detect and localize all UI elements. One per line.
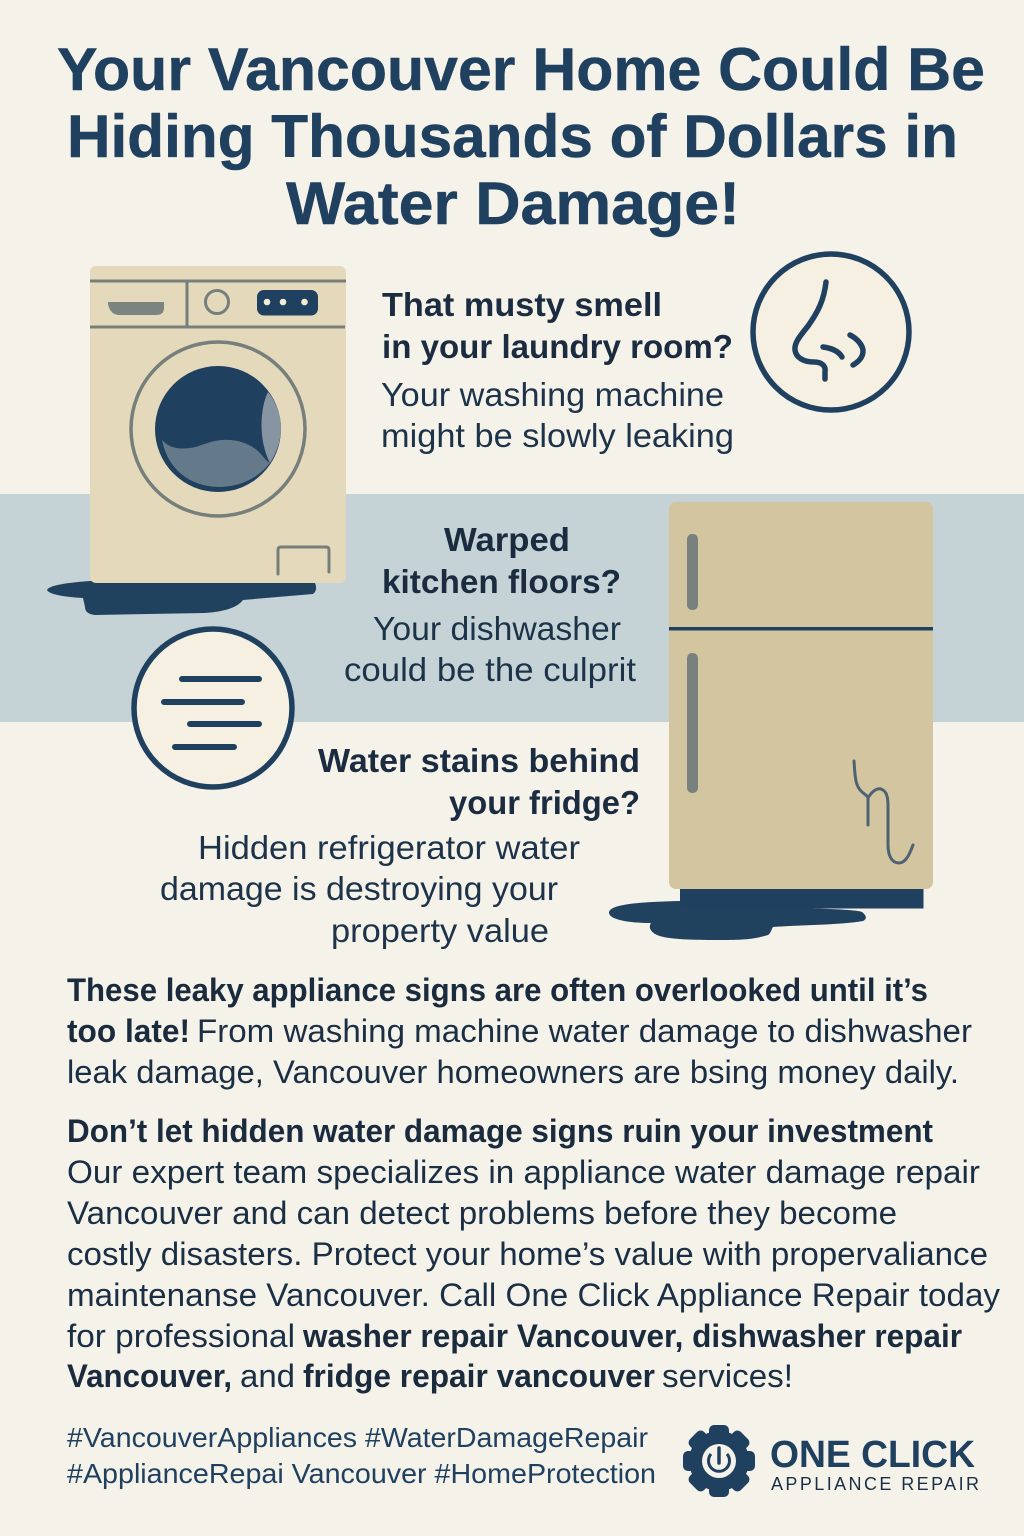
title: Water Damage!: [286, 170, 740, 237]
paragraph: call to action: Vancouver and can detect problems before they become: [67, 1195, 897, 1231]
logo: One Click Appliance Repair: [683, 1425, 979, 1497]
hashtags: #ApplianceRepai Vancouver #HomeProtection: [67, 1458, 656, 1489]
detergent drawer: [108, 302, 164, 315]
paragraph: call to action: services!: [662, 1358, 793, 1394]
paragraph: call to action: fridge repair vancouver: [303, 1358, 655, 1394]
washer door: [131, 342, 305, 516]
fridge base: [680, 888, 924, 908]
hashtags: #VancouverAppliances #WaterDamageRepair: [67, 1422, 648, 1453]
text block: water stains: damage is destroying your: [160, 870, 558, 907]
illustration: leaking washing machine: [47, 266, 346, 615]
paragraph: call to action: washer repair Vancouver, dishwasher repair: [302, 1318, 962, 1354]
paragraph: overlooked signs: too late!: [67, 1013, 190, 1049]
water puddle under fridge: [609, 901, 866, 940]
paragraph: call to action: maintenanse Vancouver. Call One Click Appliance Repair today: [67, 1277, 1000, 1313]
illustration: leaking refrigerator: [609, 502, 933, 940]
icon: water lines in circle: [134, 629, 292, 787]
text block: water stains: property value: [331, 912, 549, 949]
logo: One Click Appliance Repair: APPLIANCE REPAIR: [771, 1474, 979, 1494]
title: [57, 36, 985, 237]
text block: warped floors: Warped: [444, 521, 570, 558]
paragraph: call to action: for professional: [67, 1318, 295, 1354]
door divider: [669, 627, 933, 630]
bottom panel bracket: [278, 547, 329, 574]
hashtags: [67, 1422, 656, 1489]
text block: musty smell: might be slowly leaking: [381, 417, 734, 454]
icon: gear with power symbol: [683, 1425, 755, 1497]
text block: warped floors: Your dishwasher: [373, 610, 621, 647]
water puddle under washer: [47, 581, 316, 615]
paragraph: overlooked signs: [67, 972, 972, 1090]
logo: One Click Appliance Repair: ONE CLICK: [770, 1434, 976, 1476]
text block: musty smell: in your laundry room?: [382, 328, 733, 365]
paragraph: call to action: Don’t let hidden water damage signs ruin your investment: [67, 1113, 933, 1149]
text block: water stains: [160, 742, 640, 949]
paragraph: overlooked signs: leak damage, Vancouver homeowners are bsing money daily.: [67, 1054, 959, 1090]
text block: water stains: Water stains behind: [318, 742, 640, 779]
text block: warped floors: could be the culprit: [344, 651, 636, 688]
title: Your Vancouver Home Could Be: [57, 36, 985, 103]
crack in fridge: [854, 761, 913, 863]
dial: [206, 290, 228, 314]
fridge body: [669, 502, 933, 889]
text block: water stains: Hidden refrigerator water: [198, 829, 580, 866]
paragraph: call to action: costly disasters. Protect your home’s value with propervaliance: [67, 1236, 988, 1272]
paragraph: overlooked signs: These leaky appliance signs are often overlooked until it’s: [67, 972, 928, 1008]
title: Hiding Thousands of Dollars in: [67, 103, 958, 170]
text block: water stains: your fridge?: [449, 784, 640, 821]
paragraph: call to action: Our expert team specializes in appliance water damage repair: [67, 1154, 980, 1190]
text block: musty smell: That musty smell: [382, 286, 662, 323]
paragraph: call to action: Vancouver,: [67, 1358, 232, 1394]
washer body: [90, 266, 346, 583]
paragraph: call to action: [67, 1113, 1000, 1394]
text block: musty smell: [381, 286, 734, 454]
icon: nose in circle: [753, 254, 909, 410]
paragraph: call to action: and: [240, 1358, 295, 1394]
text block: warped floors: [344, 521, 636, 688]
paragraph: overlooked signs: From washing machine water damage to dishwasher: [197, 1013, 972, 1049]
text block: musty smell: Your washing machine: [381, 376, 724, 413]
text block: warped floors: kitchen floors?: [382, 563, 621, 600]
fridge handles: [687, 534, 698, 610]
control panel: [257, 290, 318, 316]
